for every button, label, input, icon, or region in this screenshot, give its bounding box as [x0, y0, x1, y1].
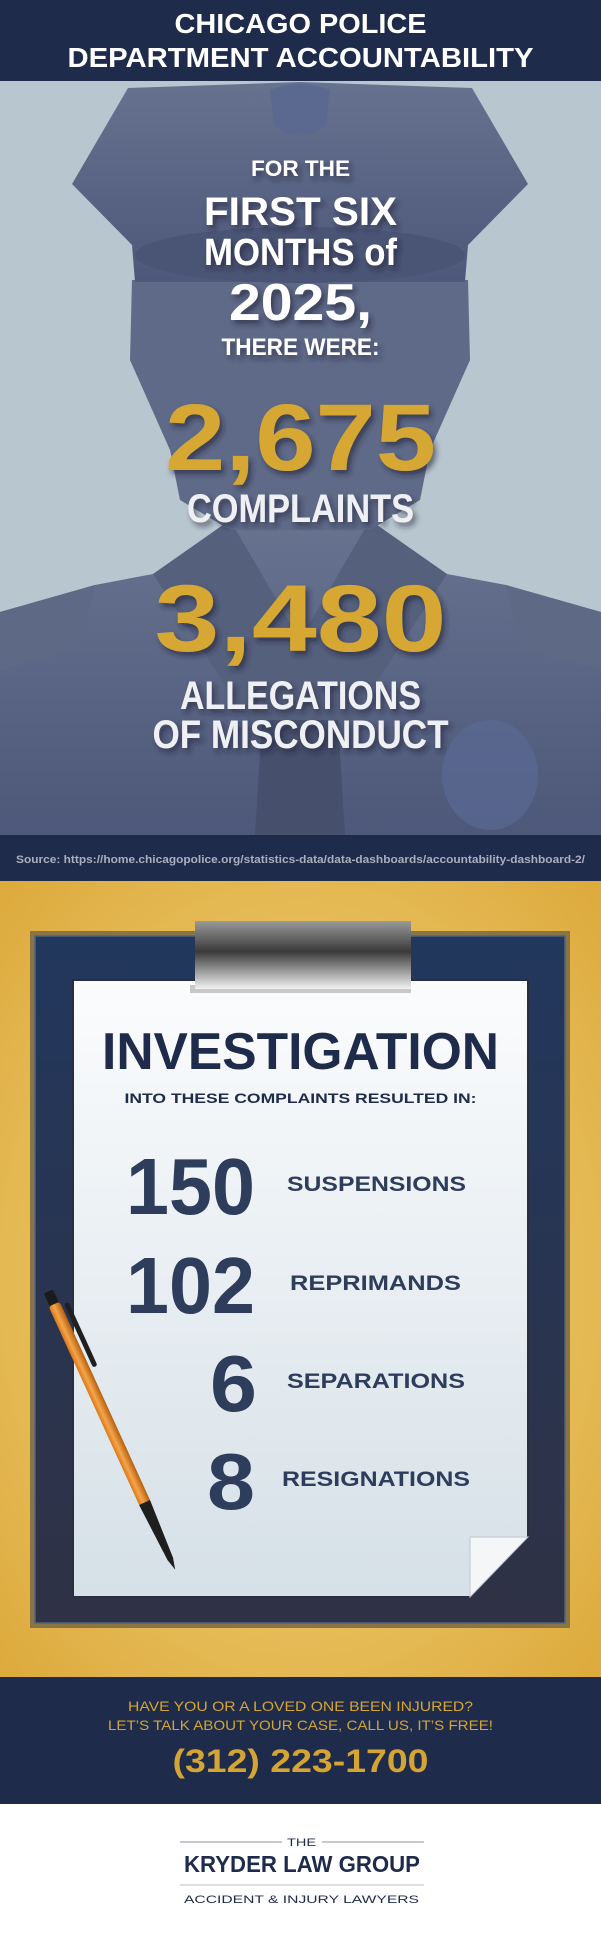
stat: complaints: 2,675	[165, 385, 436, 491]
hero text: MONTHS of	[204, 232, 397, 274]
source band: Source: https://home.chicagopolice.org/statistics-data/data-dashboards/accountability-dashboard-2/	[16, 854, 585, 866]
stat: complaints: COMPLAINTS	[187, 487, 414, 531]
results list: REPRIMANDS	[290, 1272, 461, 1295]
clipboard	[30, 921, 570, 1628]
header band: CHICAGO POLICE	[174, 8, 426, 39]
investigation heading: INVESTIGATION	[102, 1023, 499, 1081]
header band	[0, 0, 601, 81]
hero text	[204, 156, 397, 361]
results list: SUSPENSIONS	[287, 1173, 466, 1196]
stat: complaints	[165, 385, 436, 531]
call to action band	[0, 1677, 601, 1804]
logo: Kryder Law Group: KRYDER LAW GROUP	[184, 1851, 420, 1877]
source band	[0, 835, 601, 881]
results list: 150	[126, 1142, 255, 1231]
results list: SEPARATIONS	[287, 1370, 465, 1393]
clip	[190, 921, 411, 993]
logo: Kryder Law Group	[180, 1837, 424, 1906]
icon: pen	[43, 1286, 188, 1572]
stat: allegations: 3,480	[154, 566, 446, 672]
results list	[126, 1142, 470, 1526]
call to action band: LET’S TALK ABOUT YOUR CASE, CALL US, IT’S FREE!	[108, 1717, 493, 1733]
results list: RESIGNATIONS	[282, 1468, 470, 1491]
hero text: FIRST SIX	[204, 190, 397, 234]
logo: Kryder Law Group: ACCIDENT & INJURY LAWYERS	[184, 1894, 419, 1906]
call to action band: HAVE YOU OR A LOVED ONE BEEN INJURED?	[128, 1698, 473, 1714]
hero panel: officer silhouette	[0, 81, 601, 835]
hero text: 2025,	[229, 274, 372, 332]
paper	[73, 980, 528, 1597]
hero text: THERE WERE:	[222, 334, 380, 361]
header band: DEPARTMENT ACCOUNTABILITY	[68, 42, 534, 73]
logo: Kryder Law Group: THE	[287, 1837, 316, 1849]
results list: 102	[126, 1241, 255, 1330]
investigation heading	[102, 1023, 499, 1106]
call to action band: (312) 223-1700	[172, 1743, 428, 1779]
hero text: FOR THE	[251, 156, 350, 181]
stat: allegations: ALLEGATIONS	[180, 674, 421, 718]
stat: allegations	[152, 566, 448, 757]
results list: 8	[207, 1437, 255, 1526]
stat: allegations: OF MISCONDUCT	[152, 713, 448, 757]
gold background panel	[0, 881, 601, 1677]
investigation heading: INTO THESE COMPLAINTS RESULTED IN:	[124, 1090, 476, 1106]
results list: 6	[210, 1339, 257, 1428]
